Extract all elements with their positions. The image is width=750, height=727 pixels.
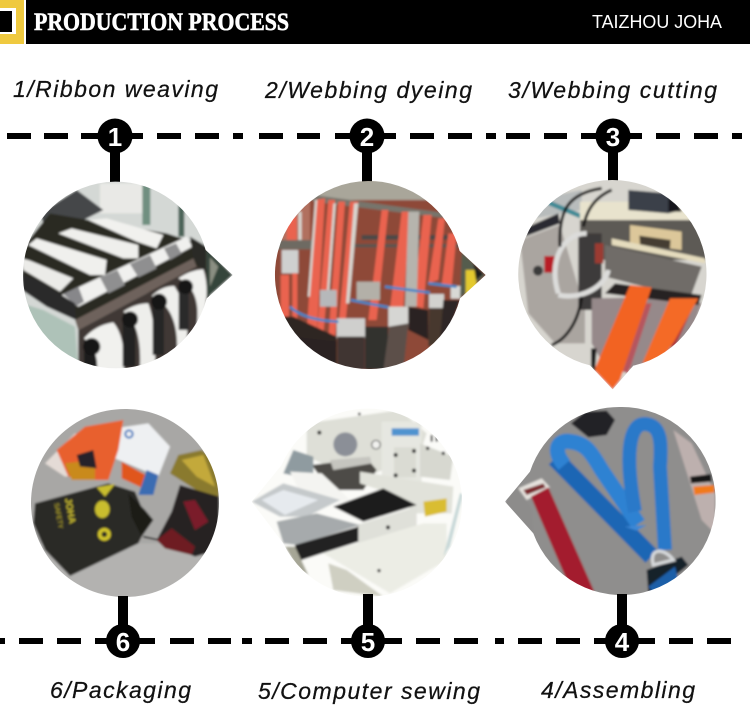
marker 4	[605, 594, 639, 658]
marker 5: 5	[361, 627, 375, 657]
marker 3	[596, 118, 630, 184]
photo: packaged products	[31, 409, 219, 597]
marker 1: 1	[108, 122, 122, 152]
step label 1: 1/Ribbon weaving	[13, 76, 218, 102]
step label 5: 5/Computer sewing	[258, 678, 480, 704]
marker 5	[351, 594, 385, 658]
photo: webbing cutting machine	[518, 180, 706, 390]
marker 4: 4	[615, 627, 630, 657]
photo: ribbon weaving machine	[23, 182, 232, 368]
marker 6	[106, 596, 140, 658]
step label 4: 4/Assembling	[541, 677, 695, 703]
company name: TAIZHOU JOHA	[592, 12, 722, 32]
title: PRODUCTION PROCESS	[34, 9, 289, 36]
photo: assembled webbing slings	[505, 407, 716, 595]
marker 6: 6	[116, 627, 130, 657]
marker 2: 2	[360, 122, 374, 152]
marker 2	[350, 118, 384, 184]
step label 6: 6/Packaging	[50, 677, 191, 703]
photo: computer sewing machine	[252, 410, 462, 596]
step label 2: 2/Webbing dyeing	[264, 77, 472, 103]
top dashed timeline	[7, 133, 742, 139]
bottom dashed timeline	[0, 638, 731, 644]
header bar	[0, 0, 750, 44]
step label 3: 3/Webbing cutting	[508, 77, 717, 103]
photo: packaged products: JOHA	[63, 497, 77, 525]
marker 3: 3	[606, 122, 620, 152]
photo: packaged products: SAFETY	[52, 502, 64, 530]
photo: webbing dyeing machine	[274, 181, 486, 369]
marker 1	[98, 118, 132, 184]
